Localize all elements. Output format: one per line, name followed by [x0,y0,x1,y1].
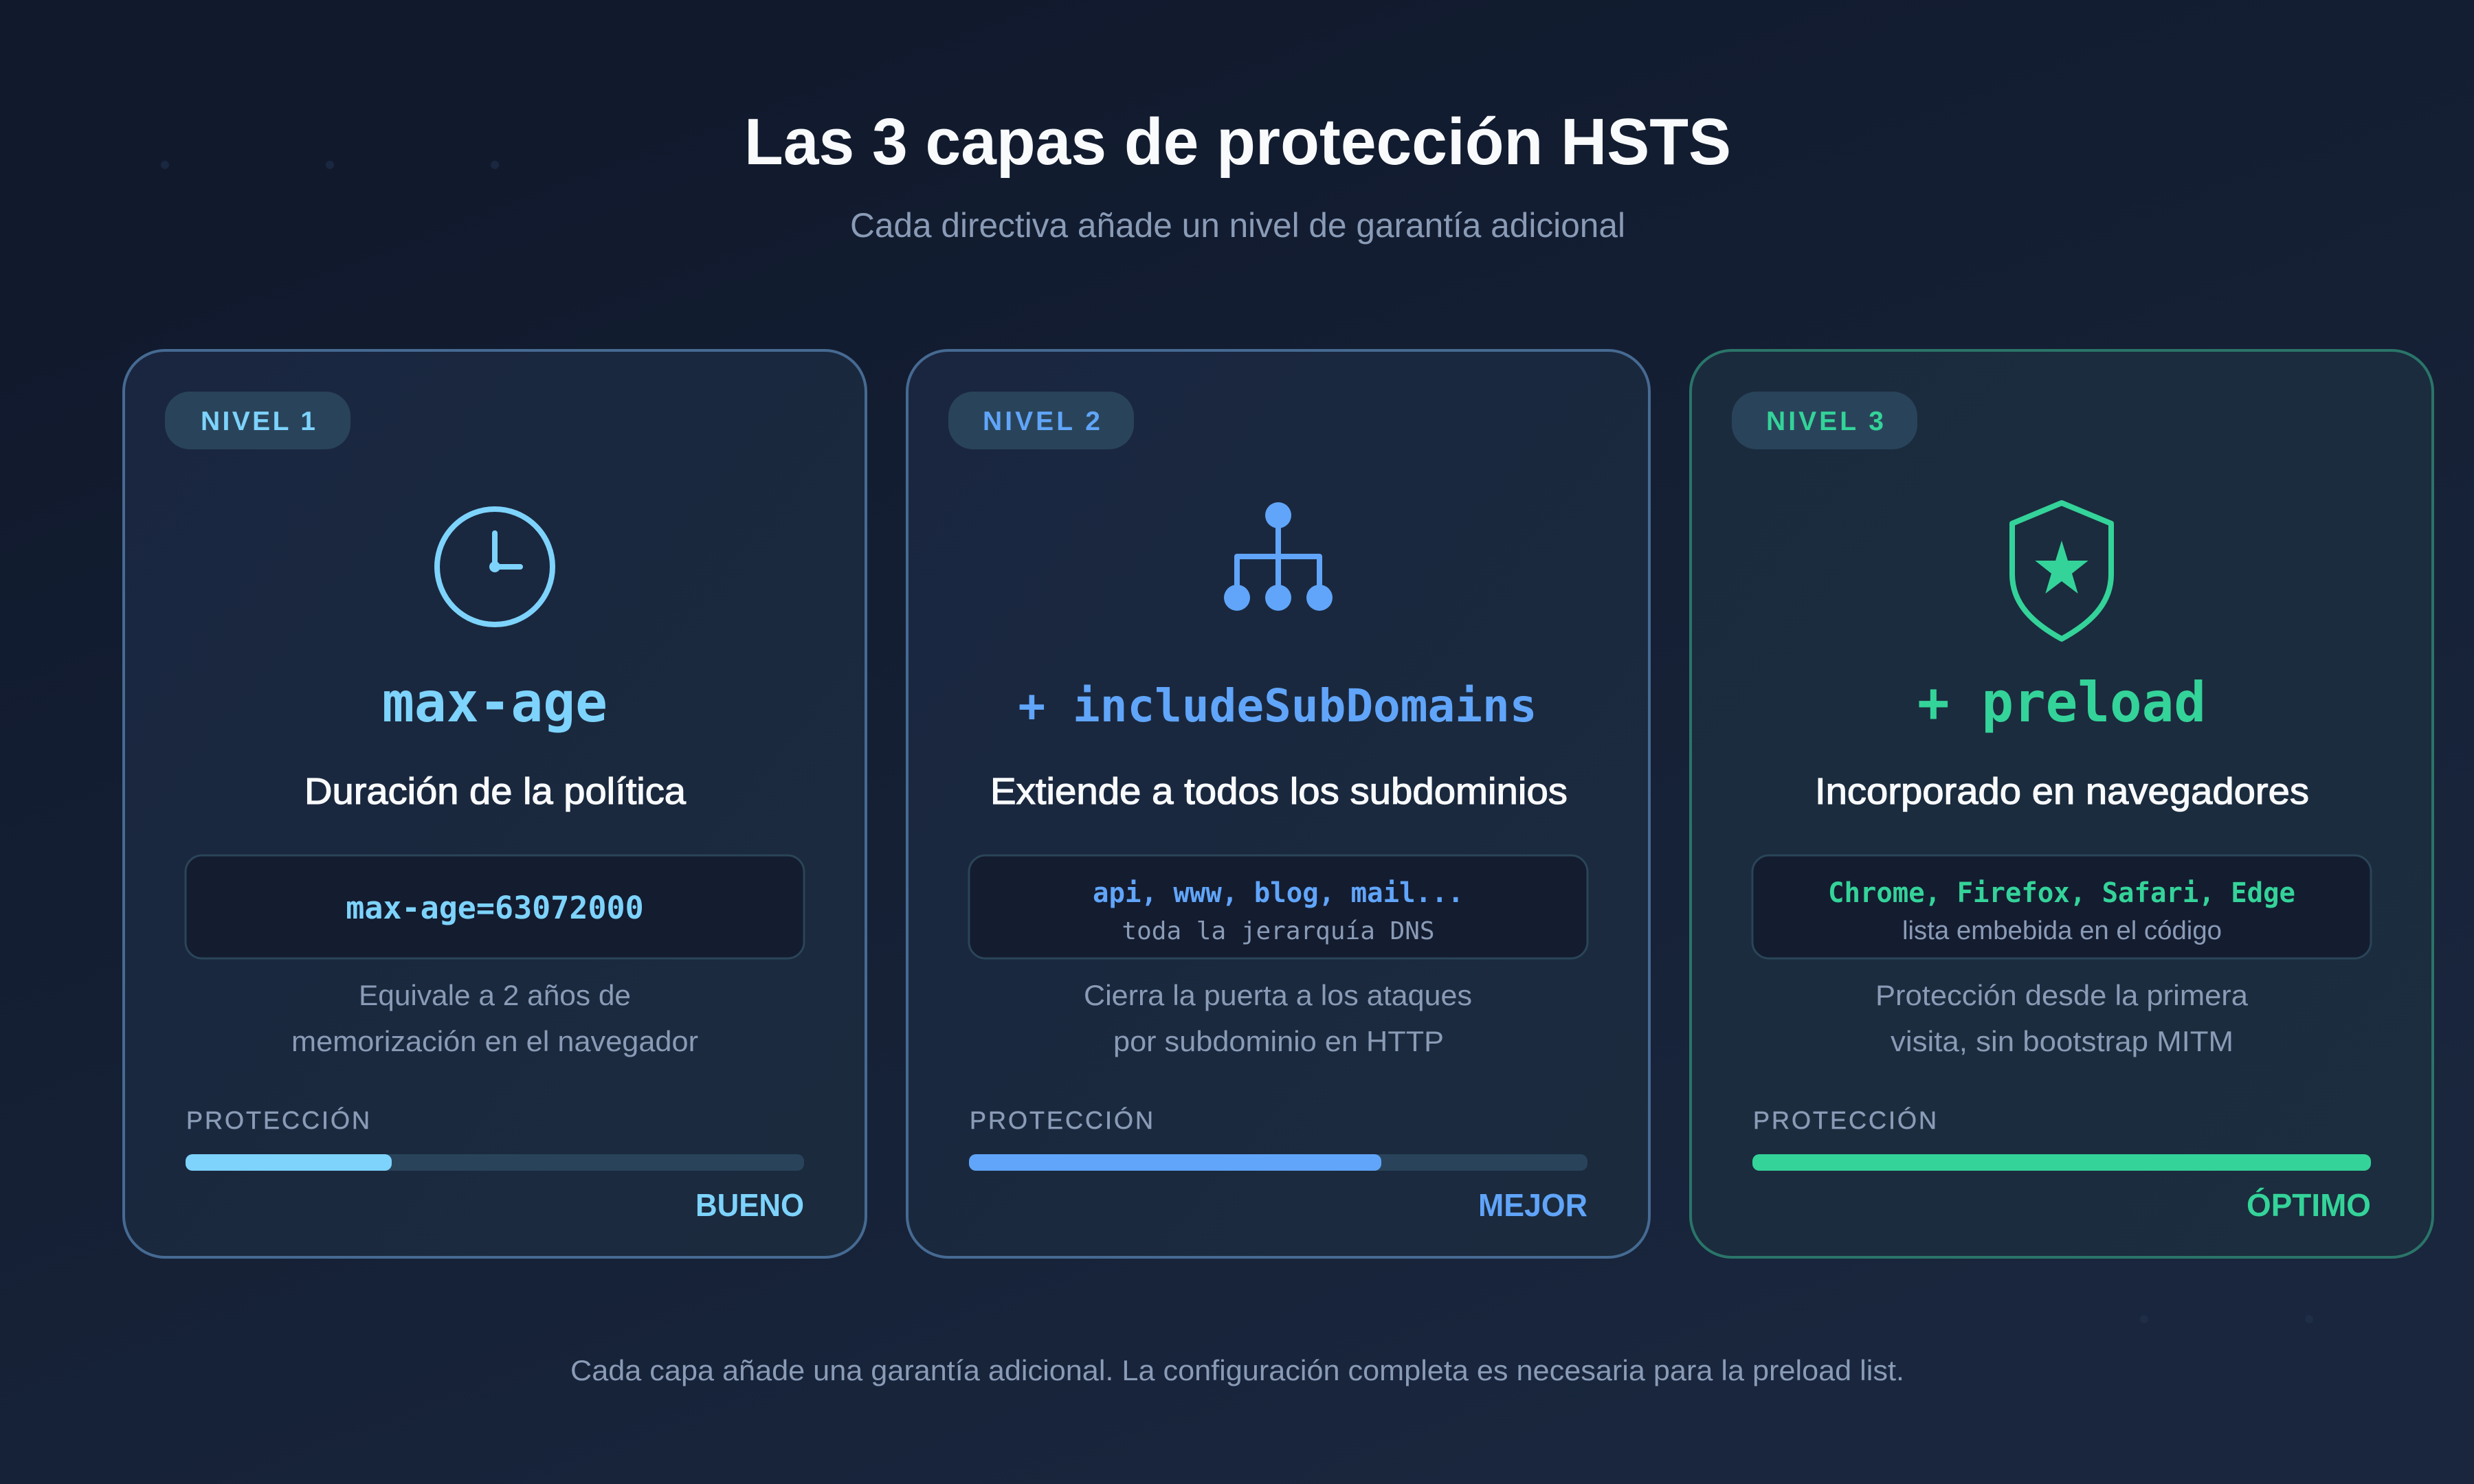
description: memorización en el navegador [291,1025,698,1057]
icon: subdomain tree [1224,502,1333,611]
badge: nivel 2 [948,392,1134,449]
badge: nivel 3: NIVEL 3 [1766,407,1884,436]
code box: Chrome, Firefox, Safari, Edge [1828,877,2295,909]
directive name: + includeSubDomains [1018,679,1537,732]
protection meter [186,1106,804,1223]
icon: clock [437,509,553,625]
badge: nivel 1: NIVEL 1 [201,407,315,436]
protection meter: PROTECCIÓN [1753,1106,1937,1134]
badge: nivel 3 [1732,392,1917,449]
panel: nivel 2 includeSubDomains [907,350,1649,1257]
directive name: max-age [382,671,608,734]
subtitle: subdomains: Extiende a todos los subdominios [990,771,1568,812]
panel: nivel 1 max-age [124,350,866,1257]
subtitle: duration: Duración de la política [304,771,687,812]
badge: nivel 1 [165,392,350,449]
description: Protección desde la primera [1875,979,2249,1011]
description [1875,979,2249,1057]
code box: api, www, blog, mail... [1093,877,1464,909]
badge: nivel 2: NIVEL 2 [983,407,1100,436]
code box: lista embebida en el código [1902,917,2222,945]
directive name: + preload [1917,671,2206,734]
subtitle: browsers: Incorporado en navegadores [1815,771,2309,812]
description: visita, sin bootstrap MITM [1891,1025,2233,1057]
code box [1752,855,2371,958]
code box [186,855,804,958]
description: Cierra la puerta a los ataques [1084,979,1472,1011]
protection meter [969,1106,1587,1223]
description: por subdominio en HTTP [1113,1025,1444,1057]
code box: max-age=63072000 [346,890,644,926]
description [1084,979,1472,1057]
description: Equivale a 2 años de [359,979,631,1011]
description [291,979,698,1057]
protection meter: ÓPTIMO [2247,1187,2371,1223]
footer note: Cada capa añade una garantía adicional. La configuración completa es necesaria para la preload list. [570,1354,1904,1386]
protection meter: PROTECCIÓN [970,1106,1153,1134]
code box: toda la jerarquía DNS [1122,917,1435,945]
protection meter [1752,1106,2371,1223]
icon: shield with star [2012,503,2111,639]
protection meter: BUENO [695,1187,804,1223]
protection meter: PROTECCIÓN [186,1106,370,1134]
panel: nivel 3 preload [1691,350,2433,1257]
title: Las 3 capas de protección HSTS [744,105,1731,179]
subtitle: Cada directiva añade un nivel de garantía adicional [850,206,1625,245]
protection meter: MEJOR [1478,1187,1587,1223]
code box [969,855,1587,958]
